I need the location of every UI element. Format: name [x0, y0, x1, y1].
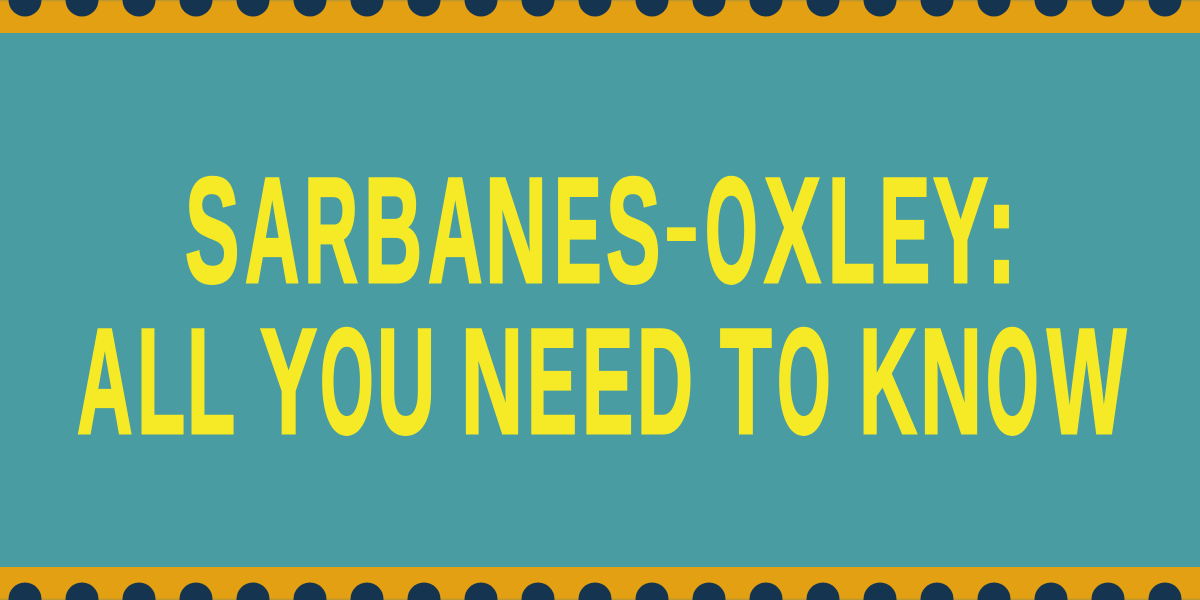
title line 2: K [859, 297, 916, 465]
title line 1: B [364, 146, 423, 314]
top dotted border [0, 0, 1200, 33]
title line 1: : [986, 146, 1017, 314]
title line 1: O [705, 146, 758, 314]
title line 2: D [637, 297, 693, 465]
title line 1: N [485, 146, 547, 314]
title line 1: S [185, 146, 239, 314]
title line 2: Y [260, 297, 317, 465]
title line 2: O [320, 297, 374, 465]
title line 2: N [461, 297, 523, 465]
title line 2: A [77, 297, 133, 465]
title line 1 [185, 146, 1017, 314]
title line 1: Y [933, 146, 988, 314]
title line 2: O [777, 297, 831, 465]
title line 1: E [879, 146, 930, 314]
title line 1: L [828, 146, 875, 314]
title: - [664, 171, 699, 280]
title line 1: E [554, 146, 602, 314]
title line 1: A [428, 146, 482, 314]
bottom dotted border [0, 567, 1200, 600]
title line 1: A [245, 146, 299, 314]
title line 2: E [527, 297, 577, 465]
title line 1: R [304, 146, 358, 314]
title line 2: L [137, 297, 185, 465]
title line 2: O [986, 297, 1039, 465]
title line 2: L [187, 297, 235, 465]
title line 2: E [582, 297, 633, 465]
title line 2: T [720, 297, 772, 465]
title line 2: U [377, 297, 435, 465]
title line 1: S [606, 146, 660, 314]
title line 1: X [764, 146, 821, 314]
title line 2: W [1047, 297, 1126, 465]
title line 2: N [920, 297, 982, 465]
title line 2 [77, 297, 1128, 465]
